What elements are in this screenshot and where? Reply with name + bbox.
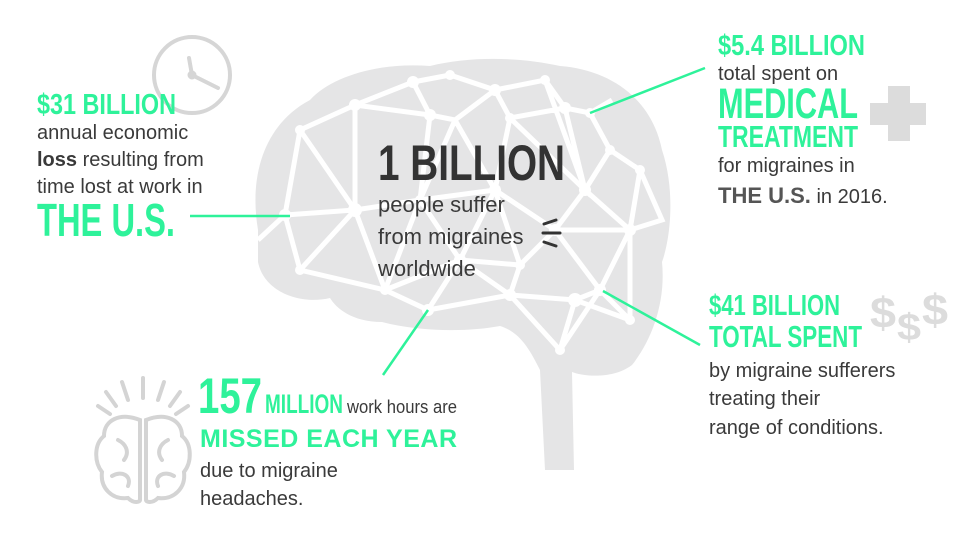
text: 157 million: MISSED EACH YEAR [200, 425, 457, 453]
text: 1 billion [377, 135, 565, 281]
text: $31 billion [37, 89, 204, 246]
text: $41 billion: TOTAL SPENT [709, 319, 862, 354]
text: $31 billion: THE U.S. [37, 194, 175, 246]
text: $5.4 billion: TREATMENT [718, 119, 858, 154]
icon: brain outline [96, 378, 190, 502]
text: $5.4 billion [718, 30, 888, 208]
icon: dollars: $ [870, 289, 896, 338]
icon: clock [154, 37, 230, 113]
text: $5.4 billion: THE U.S. in 2016. [718, 183, 888, 208]
text: 157 million: due to migraine [200, 460, 338, 482]
text: $41 billion: $41 BILLION [709, 290, 840, 322]
text: 1 billion: from migraines [378, 224, 523, 249]
text: $5.4 billion: for migraines in [718, 155, 855, 177]
text: 157 million: 157 [198, 368, 262, 424]
text: 157 million [198, 368, 457, 510]
text: 157 million: MILLION [265, 389, 343, 419]
text: 1 billion: worldwide [377, 256, 476, 281]
text: 1 billion: people suffer [378, 192, 505, 217]
text: $31 billion: $31 BILLION [37, 89, 176, 121]
text: $31 billion: time lost at work in [37, 176, 203, 198]
brain silhouette with network [255, 59, 670, 470]
text: 157 million: work hours are [346, 397, 457, 417]
icon: dollars [870, 286, 948, 349]
text: $41 billion: treating their [709, 388, 821, 410]
text: $31 billion: annual economic [37, 122, 188, 144]
text: $5.4 billion: MEDICAL [718, 80, 858, 128]
text: $5.4 billion: $5.4 BILLION [718, 30, 865, 62]
text: 1 billion: 1 BILLION [378, 135, 565, 191]
text: $5.4 billion: total spent on [718, 63, 838, 85]
text: $41 billion: by migraine sufferers [709, 360, 895, 382]
icon: plus [870, 86, 926, 141]
text: $41 billion: range of conditions. [709, 417, 884, 439]
connector lines [190, 68, 705, 375]
text: $41 billion [709, 290, 895, 439]
icon: dollars: $ [897, 307, 921, 349]
text: 157 million: headaches. [200, 488, 303, 510]
icon: dollars: $ [922, 286, 948, 335]
text: $31 billion: loss resulting from [37, 149, 204, 171]
